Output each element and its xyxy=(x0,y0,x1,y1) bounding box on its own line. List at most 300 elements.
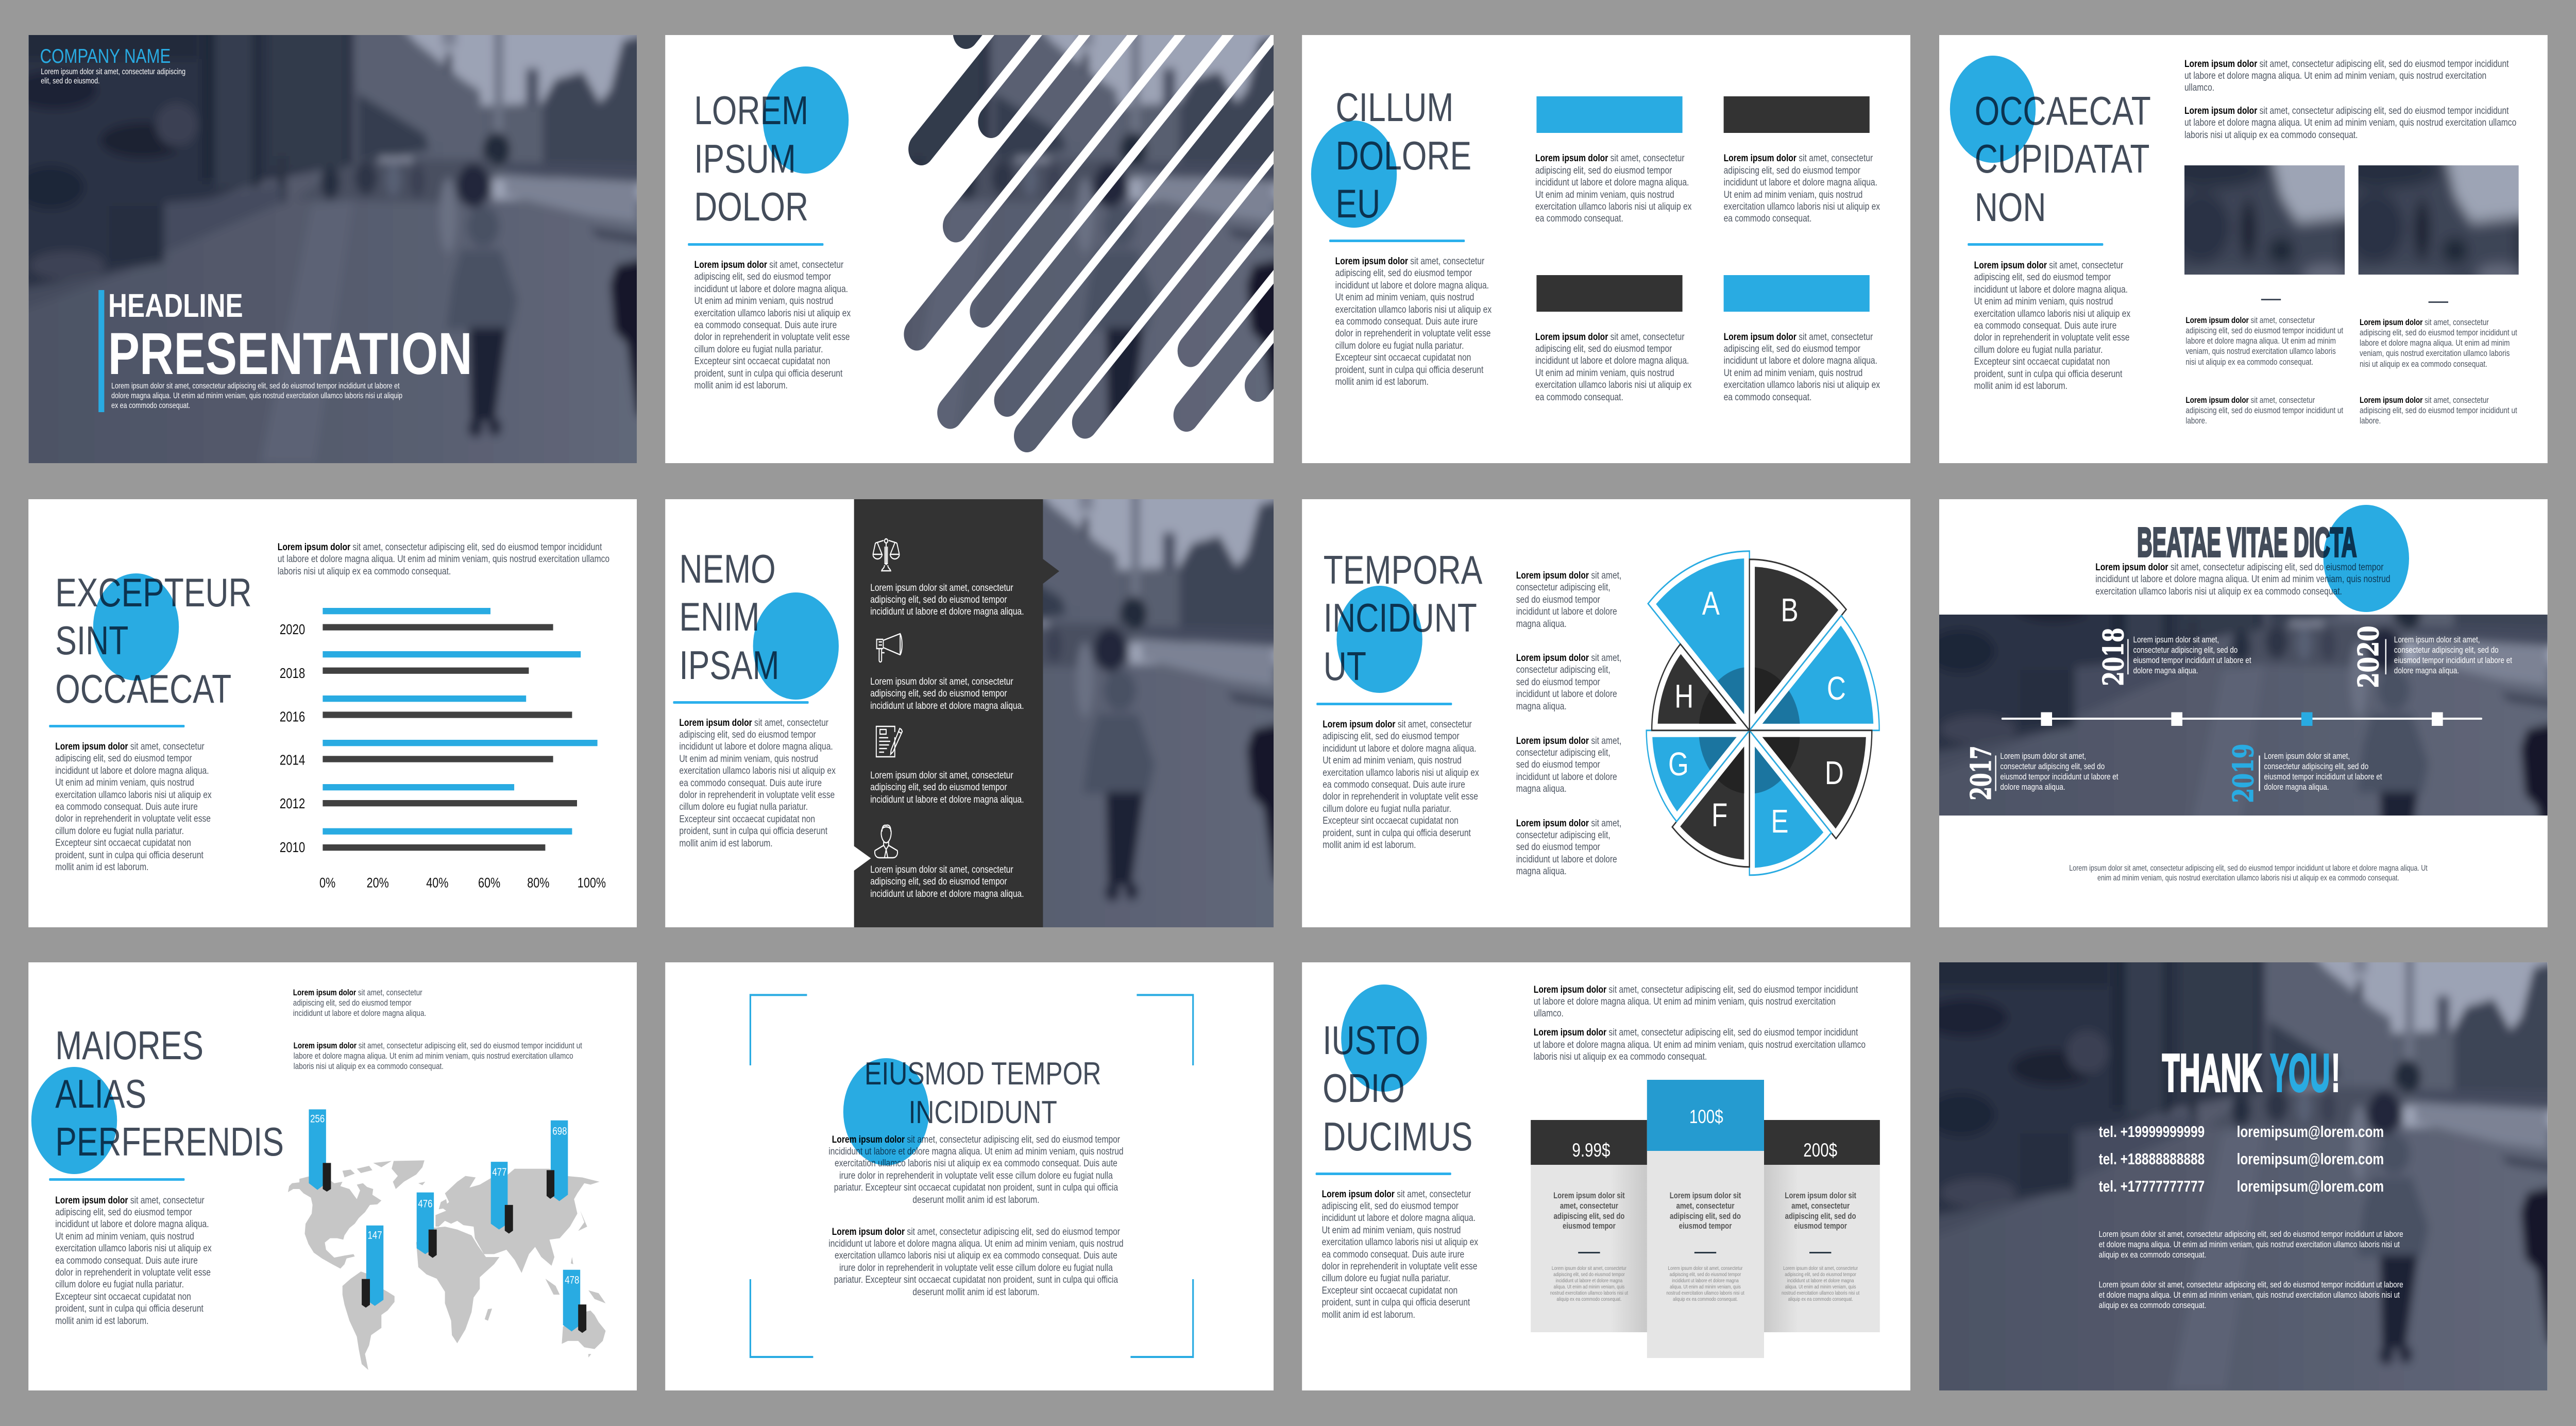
top paragraph two: laboris nisi ut aliquip ex ea commodo consequat. xyxy=(2184,129,2358,141)
heading: OCCAECAT xyxy=(55,666,231,711)
dash two xyxy=(1694,1252,1716,1253)
body text: incididunt ut labore et dolore magna aliqua. xyxy=(1322,1212,1476,1224)
body text: Ut enim ad minim veniam, quis nostrud xyxy=(679,753,818,765)
heading: SINT xyxy=(55,618,128,663)
body text: exercitation ullamco laboris nisi ut aliquip ex xyxy=(1323,767,1479,778)
wedge C xyxy=(1750,616,1906,811)
blue circle xyxy=(1950,56,2036,163)
bar chart: 40% xyxy=(426,875,448,890)
timeline xyxy=(1939,615,2548,816)
blue circle xyxy=(1311,121,1397,228)
icon text three: adipiscing elit, sed do eiusmod tempor xyxy=(870,782,1007,793)
blue circle xyxy=(753,592,839,700)
panel: nemo enim ipsam with icon list and photo xyxy=(665,499,1274,927)
heading xyxy=(1336,84,1471,226)
wedge G xyxy=(1625,666,1750,821)
panel: eiusmod tempor incididunt centred text xyxy=(665,962,1274,1390)
wheel text four xyxy=(1516,817,1621,878)
text top left: adipiscing elit, sed do eiusmod tempor xyxy=(1535,165,1672,176)
body text: adipiscing elit, sed do eiusmod tempor xyxy=(1323,731,1460,742)
top paragraph two: labore et dolore magna aliqua. Ut enim ad minim veniam, quis nostrud exercitation ullamco xyxy=(294,1051,573,1061)
body text: mollit anim id est laborum. xyxy=(694,380,788,391)
body text: proident, sunt in culpa qui officia deserunt xyxy=(1974,368,2122,380)
heading: IPSAM xyxy=(679,642,779,688)
heading: EXCEPTEUR xyxy=(55,570,252,615)
heading xyxy=(1324,546,1482,690)
milestone text 2018: dolore magna aliqua. xyxy=(2133,666,2198,675)
top paragraph: Lorem ipsum dolor sit amet, consectetur adipiscing elit, sed do eiusmod tempor incididunt xyxy=(278,541,602,553)
pin 476: 476 xyxy=(418,1198,432,1210)
top paragraph one: Lorem ipsum dolor sit amet, consectetur adipiscing elit, sed do eiusmod tempor incididunt xyxy=(1534,984,1858,995)
closing paragraph one xyxy=(2099,1229,2403,1261)
paragraph two: irure dolor in reprehenderit in voluptate velit esse cillum dolore eu fugiat nulla xyxy=(839,1262,1113,1274)
text top right: incididunt ut labore et dolore magna aliqua. xyxy=(1724,177,1877,188)
text bottom right: adipiscing elit, sed do eiusmod tempor xyxy=(1724,343,1860,354)
wedge letters: B xyxy=(1781,591,1799,629)
pin 698: 698 xyxy=(552,1125,567,1137)
plan title three: Lorem ipsum dolor sit xyxy=(1785,1191,1856,1200)
wheel text two: consectetur adipiscing elit, xyxy=(1516,664,1611,675)
body text: Excepteur sint occaecat cupidatat non xyxy=(1322,1285,1458,1296)
heading: LOREM xyxy=(694,88,808,133)
body text: Ut enim ad minim veniam, quis nostrud xyxy=(55,777,194,788)
body text: exercitation ullamco laboris nisi ut aliquip ex xyxy=(55,1243,212,1254)
note left: labore. xyxy=(2185,416,2207,426)
icon: person xyxy=(874,823,900,859)
plan text one: adipiscing elit, sed do eiusmod tempor xyxy=(1553,1272,1625,1278)
top paragraph one: ut labore et dolore magna aliqua. Ut enim ad minim veniam, quis nostrud exercitation xyxy=(1534,996,1836,1007)
heading xyxy=(679,545,779,689)
bar chart: 100% xyxy=(578,875,605,890)
diagonal photo stripes xyxy=(904,35,1274,452)
bar chart: 2018 xyxy=(280,665,305,681)
body text: Lorem ipsum dolor sit amet, consectetur xyxy=(679,717,828,728)
company tagline xyxy=(41,67,185,86)
text bottom right xyxy=(1724,331,1880,403)
dark block bottom left xyxy=(1536,275,1683,311)
top paragraph two: Lorem ipsum dolor sit amet, consectetur adipiscing elit, sed do eiusmod tempor incididunt xyxy=(1534,1027,1858,1038)
heading: NON xyxy=(1975,184,2046,230)
pin 147 xyxy=(362,1226,383,1308)
paragraph two: Lorem ipsum dolor sit amet, consectetur adipiscing elit, sed do eiusmod tempor xyxy=(832,1226,1120,1237)
plan text two: aliquip ex ea commodo consequat. xyxy=(1673,1297,1738,1302)
email addresses: loremipsum@lorem.com xyxy=(2237,1178,2384,1195)
icon text one: incididunt ut labore et dolore magna aliqua. xyxy=(870,606,1024,617)
body text: exercitation ullamco laboris nisi ut aliquip ex xyxy=(1322,1236,1478,1248)
body text: ea commodo consequat. Duis aute irure xyxy=(1335,316,1478,327)
body text: adipiscing elit, sed do eiusmod tempor xyxy=(679,729,816,740)
milestone text 2020: eiusmod tempor incididunt ut labore et xyxy=(2394,655,2512,665)
body text: Ut enim ad minim veniam, quis nostrud xyxy=(1323,755,1462,766)
wheel text one xyxy=(1516,570,1621,630)
text top left: Ut enim ad minim veniam, quis nostrud xyxy=(1535,189,1674,200)
body text: proident, sunt in culpa qui officia deserunt xyxy=(1335,364,1483,376)
closing text: Lorem ipsum dolor sit amet, consectetur adipiscing elit, sed do eiusmod tempor incididunt ut labore et dolore magna aliqua. Ut xyxy=(2069,864,2428,873)
body text: ea commodo consequat. Duis aute irure xyxy=(679,777,822,789)
text bottom right: Lorem ipsum dolor sit amet, consectetur xyxy=(1724,331,1873,342)
paragraph two: exercitation ullamco laboris nisi ut aliquip ex ea commodo consequat. Duis aute xyxy=(835,1250,1117,1261)
milestone text 2017: Lorem ipsum dolor sit amet, xyxy=(2000,751,2086,760)
phone numbers: tel. +18888888888 xyxy=(2099,1150,2205,1168)
text top right: ea commodo consequat. xyxy=(1724,213,1811,224)
paragraph one: pariatur. Excepteur sint occaecat cupidatat non proident, sunt in culpa qui officia xyxy=(834,1182,1118,1193)
milestone text 2020: consectetur adipiscing elit, sed do xyxy=(2394,645,2499,654)
dash three xyxy=(1809,1252,1831,1253)
body text: exercitation ullamco laboris nisi ut aliquip ex xyxy=(55,789,212,801)
plan text one: nostrud exercitation ullamco laboris nisi ut xyxy=(1550,1291,1628,1296)
text top left: incididunt ut labore et dolore magna aliqua. xyxy=(1535,177,1689,188)
body text: adipiscing elit, sed do eiusmod tempor xyxy=(55,753,192,764)
blue circle xyxy=(1336,585,1422,692)
pin 477: 477 xyxy=(492,1166,506,1178)
body text: adipiscing elit, sed do eiusmod tempor xyxy=(694,271,831,282)
top paragraph two: laboris nisi ut aliquip ex ea commodo consequat. xyxy=(1534,1051,1707,1062)
pin 477 xyxy=(491,1162,513,1233)
wedge D xyxy=(1750,730,1872,838)
email addresses xyxy=(2237,1118,2384,1201)
blue block bottom right xyxy=(1724,275,1870,311)
heading xyxy=(55,569,252,713)
plan text two: incididunt ut labore et dolore magna xyxy=(1672,1278,1739,1284)
body text xyxy=(694,259,851,391)
icon text four: Lorem ipsum dolor sit amet, consectetur xyxy=(870,864,1013,875)
note right: adipiscing elit, sed do eiusmod tempor incididunt ut xyxy=(2360,405,2517,415)
top paragraph two xyxy=(2184,105,2516,141)
body text: Lorem ipsum dolor sit amet, consectetur xyxy=(1974,260,2123,271)
icon text four xyxy=(870,864,1024,900)
body text: Excepteur sint occaecat cupidatat non xyxy=(694,355,830,367)
body text: Ut enim ad minim veniam, quis nostrud xyxy=(694,295,833,307)
milestone text 2019: Lorem ipsum dolor sit amet, xyxy=(2264,751,2350,760)
note left xyxy=(2185,395,2343,427)
plan title three xyxy=(1763,1191,1878,1232)
wedge letters xyxy=(1668,584,1846,840)
body text: ea commodo consequat. Duis aute irure xyxy=(55,1255,198,1266)
note right: labore. xyxy=(2360,416,2381,426)
timeline: 2019 xyxy=(2227,744,2260,803)
photo right xyxy=(1043,499,1274,927)
closing paragraph two: Lorem ipsum dolor sit amet, consectetur adipiscing elit, sed do eiusmod tempor incididunt ut labore xyxy=(2099,1280,2403,1289)
body text: Lorem ipsum dolor sit amet, consectetur xyxy=(694,259,843,270)
body text: adipiscing elit, sed do eiusmod tempor xyxy=(1335,267,1472,279)
paragraph one xyxy=(770,1133,1182,1206)
dash left xyxy=(2261,299,2281,300)
note right xyxy=(2360,395,2517,427)
company tagline: elit, sed do eiusmod. xyxy=(41,77,100,86)
text top left: Lorem ipsum dolor sit amet, consectetur xyxy=(1535,152,1685,164)
body text: Ut enim ad minim veniam, quis nostrud xyxy=(1322,1225,1461,1236)
photo left xyxy=(2184,165,2345,275)
heading xyxy=(55,1022,284,1166)
intro paragraph: exercitation ullamco laboris nisi ut aliquip ex ea commodo consequat. xyxy=(2095,586,2342,597)
wheel text one: consectetur adipiscing elit, xyxy=(1516,582,1611,593)
wheel text one: incididunt ut labore et dolore xyxy=(1516,606,1617,617)
bar chart: 80% xyxy=(527,875,549,890)
paragraph two xyxy=(770,1226,1182,1298)
plan text two: aliqua. Ut enim ad minim veniam, quis xyxy=(1670,1284,1741,1290)
text bottom left: ea commodo consequat. xyxy=(1535,392,1623,403)
heading: IPSUM xyxy=(694,136,796,181)
body text: incididunt ut labore et dolore magna aliqua. xyxy=(1974,284,2128,295)
body text: ea commodo consequat. Duis aute irure xyxy=(55,801,198,812)
heading: ODIO xyxy=(1323,1065,1405,1111)
top paragraph two: laboris nisi ut aliquip ex ea commodo consequat. xyxy=(294,1061,444,1071)
text bottom right: incididunt ut labore et dolore magna aliqua. xyxy=(1724,355,1877,366)
body text: cillum dolore eu fugiat nulla pariatur. xyxy=(694,344,823,355)
heading: ALIAS xyxy=(55,1071,146,1116)
caption right: nisi ut aliquip ex ea commodo consequat. xyxy=(2360,359,2487,369)
plan text three: Lorem ipsum dolor sit amet, consectetur xyxy=(1783,1266,1858,1271)
wheel text three: consectetur adipiscing elit, xyxy=(1516,747,1611,758)
heading xyxy=(694,88,808,229)
plan title two: eiusmod tempor xyxy=(1679,1221,1732,1231)
icon text one: adipiscing elit, sed do eiusmod tempor xyxy=(870,594,1007,605)
blue circle xyxy=(2324,505,2409,612)
body text: incididunt ut labore et dolore magna aliqua. xyxy=(1335,280,1489,291)
intro paragraph: Lorem ipsum dolor sit amet, consectetur adipiscing elit, sed do eiusmod tempor xyxy=(2095,562,2383,573)
body text: ea commodo consequat. Duis aute irure xyxy=(1323,779,1465,790)
body text: mollit anim id est laborum. xyxy=(679,838,773,849)
blue block top left xyxy=(1536,96,1683,133)
closing paragraph one: aliquip ex ea commodo consequat. xyxy=(2099,1250,2206,1260)
plan text three: adipiscing elit, sed do eiusmod tempor xyxy=(1785,1272,1856,1278)
body text: exercitation ullamco laboris nisi ut aliquip ex xyxy=(679,765,836,776)
wheel text three xyxy=(1516,735,1621,795)
icon text three: Lorem ipsum dolor sit amet, consectetur xyxy=(870,770,1013,781)
body text: proident, sunt in culpa qui officia deserunt xyxy=(1323,827,1471,839)
heading: EU xyxy=(1336,181,1380,226)
body text: dolor in reprehenderit in voluptate velit esse xyxy=(1322,1261,1477,1272)
heading: TEMPORA xyxy=(1324,547,1482,592)
text top left: ea commodo consequat. xyxy=(1535,213,1623,224)
icon text two: incididunt ut labore et dolore magna aliqua. xyxy=(870,700,1024,711)
panel: beatae vitae dicta timeline xyxy=(1939,499,2548,927)
top paragraph two: Lorem ipsum dolor sit amet, consectetur adipiscing elit, sed do eiusmod tempor incididunt ut xyxy=(294,1041,582,1050)
heading: PERFERENDIS xyxy=(55,1119,284,1164)
body text xyxy=(1335,256,1492,387)
body text: mollit anim id est laborum. xyxy=(1335,376,1429,387)
heading xyxy=(777,1055,1189,1132)
closing text: enim ad minim veniam, quis nostrud exercitation ullamco laboris nisi ut aliquip ex ea commodo consequat. xyxy=(2097,874,2399,882)
heading: DOLORE xyxy=(1336,133,1471,178)
body text: mollit anim id est laborum. xyxy=(1323,839,1416,851)
body text: Lorem ipsum dolor sit amet, consectetur xyxy=(1322,1188,1471,1199)
body text: Lorem ipsum dolor sit amet, consectetur xyxy=(1323,719,1472,730)
body text: Excepteur sint occaecat cupidatat non xyxy=(1335,352,1471,363)
plan text one: incididunt ut labore et dolore magna xyxy=(1556,1278,1622,1284)
top paragraph one xyxy=(1534,984,1858,1020)
pin 478: 478 xyxy=(565,1275,579,1286)
wedge A xyxy=(1648,514,1821,730)
body text: proident, sunt in culpa qui officia deserunt xyxy=(694,368,842,379)
wedge letters: F xyxy=(1711,796,1727,834)
note left: adipiscing elit, sed do eiusmod tempor incididunt ut xyxy=(2185,405,2343,415)
bar chart: 20% xyxy=(367,875,389,890)
body text: ea commodo consequat. Duis aute irure xyxy=(1974,320,2116,331)
price header three: 200$ xyxy=(1803,1140,1837,1161)
plan title three: amet, consectetur xyxy=(1791,1201,1850,1211)
timeline: 2017 xyxy=(1965,746,1998,801)
heading underline xyxy=(673,701,809,704)
closing paragraph one: et dolore magna aliqua. Ut enim ad minim veniam, quis nostrud exercitation ullamco laboris nisi ut xyxy=(2099,1240,2400,1249)
company name: COMPANY NAME xyxy=(40,45,171,67)
body text: Excepteur sint occaecat cupidatat non xyxy=(1323,815,1459,826)
text bottom right: ea commodo consequat. xyxy=(1724,392,1811,403)
paragraph two: incididunt ut labore et dolore magna aliqua. Ut enim ad minim veniam, quis nostrud xyxy=(828,1238,1124,1249)
note left: Lorem ipsum dolor sit amet, consectetur xyxy=(2185,395,2315,405)
body text: proident, sunt in culpa qui officia deserunt xyxy=(1322,1297,1470,1308)
body text: Lorem ipsum dolor sit amet, consectetur xyxy=(1335,256,1484,267)
body text: ea commodo consequat. Duis aute irure xyxy=(1322,1249,1464,1260)
wedge letters: H xyxy=(1674,677,1693,715)
plan title two: adipiscing elit, sed do xyxy=(1670,1212,1741,1221)
dark centre panel with arrows xyxy=(854,499,1060,927)
closing paragraph two: aliquip ex ea commodo consequat. xyxy=(2099,1300,2206,1310)
body text: incididunt ut labore et dolore magna aliqua. xyxy=(1323,743,1477,754)
wheel text three: sed do eiusmod tempor xyxy=(1516,759,1600,770)
paragraph one: irure dolor in reprehenderit in voluptate velit esse cillum dolore eu fugiat nulla xyxy=(839,1170,1113,1181)
top paragraph one: Lorem ipsum dolor sit amet, consectetur xyxy=(293,988,422,997)
dash one xyxy=(1578,1252,1600,1253)
heading: OCCAECAT xyxy=(1975,88,2151,133)
heading underline xyxy=(688,243,823,246)
text bottom left: Ut enim ad minim veniam, quis nostrud xyxy=(1535,367,1674,379)
milestone text 2019: eiusmod tempor incididunt ut labore et xyxy=(2264,772,2382,781)
top paragraph: ut labore et dolore magna aliqua. Ut enim ad minim veniam, quis nostrud exercitation ullamco xyxy=(278,553,609,565)
body text: incididunt ut labore et dolore magna aliqua. xyxy=(55,1218,209,1230)
closing paragraph one: Lorem ipsum dolor sit amet, consectetur adipiscing elit, sed do eiusmod tempor incididunt ut labore xyxy=(2099,1229,2403,1239)
plan text one: aliquip ex ea commodo consequat. xyxy=(1556,1297,1621,1302)
wheel text three: magna aliqua. xyxy=(1516,783,1567,794)
body text: dolor in reprehenderit in voluptate velit esse xyxy=(679,789,835,801)
milestone text 2020 xyxy=(2394,635,2512,676)
wheel text three: Lorem ipsum dolor sit amet, xyxy=(1516,735,1621,746)
plan text two xyxy=(1647,1266,1764,1302)
plan text two: nostrud exercitation ullamco laboris nisi ut xyxy=(1666,1291,1744,1296)
pricing column one xyxy=(1531,1120,1648,1332)
text top right: Lorem ipsum dolor sit amet, consectetur xyxy=(1724,152,1873,164)
top paragraph one: ullamco. xyxy=(2184,82,2214,93)
wheel text one: Lorem ipsum dolor sit amet, xyxy=(1516,570,1621,581)
heading underline xyxy=(1968,243,2103,246)
bar chart: 2014 xyxy=(280,752,305,768)
pin 256: 256 xyxy=(310,1113,325,1125)
body text: exercitation ullamco laboris nisi ut aliquip ex xyxy=(694,308,851,319)
text bottom left xyxy=(1535,331,1692,403)
heading: UT xyxy=(1324,643,1366,689)
intro paragraph xyxy=(2095,562,2391,598)
wheel text two: sed do eiusmod tempor xyxy=(1516,676,1600,688)
body text xyxy=(679,717,836,850)
body text: proident, sunt in culpa qui officia deserunt xyxy=(679,825,827,837)
body text: proident, sunt in culpa qui officia deserunt xyxy=(55,1303,204,1314)
plan text one: Lorem ipsum dolor sit amet, consectetur xyxy=(1552,1266,1626,1271)
top paragraph two: Lorem ipsum dolor sit amet, consectetur adipiscing elit, sed do eiusmod tempor incididunt xyxy=(2184,105,2509,116)
milestone text 2018 xyxy=(2133,635,2251,676)
body text: mollit anim id est laborum. xyxy=(1322,1309,1415,1320)
body text: Excepteur sint occaecat cupidatat non xyxy=(55,837,191,848)
body text: dolor in reprehenderit in voluptate velit esse xyxy=(1335,328,1490,339)
bar chart: 0% xyxy=(319,875,335,890)
body text xyxy=(1323,719,1479,851)
heading xyxy=(1975,88,2151,230)
heading: DOLOR xyxy=(694,184,808,229)
milestone text 2020: dolore magna aliqua. xyxy=(2394,666,2459,675)
caption right: veniam, quis nostrud exercitation ullamco laboris xyxy=(2360,348,2510,358)
wheel text three: incididunt ut labore et dolore xyxy=(1516,771,1617,783)
top paragraph two xyxy=(294,1041,582,1072)
body text xyxy=(1322,1188,1478,1321)
wedge letters: A xyxy=(1702,584,1720,621)
caption right: adipiscing elit, sed do eiusmod tempor incididunt ut xyxy=(2360,328,2517,337)
icon: document and pen xyxy=(875,724,904,758)
price header two xyxy=(1647,1080,1764,1151)
plan title two xyxy=(1647,1191,1764,1232)
photo right xyxy=(2359,165,2519,275)
caption left: veniam, quis nostrud exercitation ullamco laboris xyxy=(2185,346,2336,356)
panel: cillum dolore eu four blocks xyxy=(1302,35,1910,463)
email addresses: loremipsum@lorem.com xyxy=(2237,1123,2384,1141)
panel: occaecat cupidatat non with two photos xyxy=(1939,35,2548,463)
intro text: Lorem ipsum dolor sit amet, consectetur adipiscing elit, sed do eiusmod tempor incididunt ut labore et xyxy=(111,382,400,391)
text bottom left: exercitation ullamco laboris nisi ut aliquip ex xyxy=(1535,379,1691,391)
body text: cillum dolore eu fugiat nulla pariatur. xyxy=(1322,1272,1450,1284)
plan text one: aliqua. Ut enim ad minim veniam, quis xyxy=(1554,1284,1624,1290)
pie wheel xyxy=(1638,543,1885,883)
body text: exercitation ullamco laboris nisi ut aliquip ex xyxy=(1974,308,2130,319)
wedge H xyxy=(1652,644,1750,730)
paragraph two: deserunt mollit anim id est laborum. xyxy=(912,1286,1040,1298)
intro text: ex ea commodo consequat. xyxy=(111,401,190,410)
body text: dolor in reprehenderit in voluptate velit esse xyxy=(1974,332,2129,343)
wheel text one: magna aliqua. xyxy=(1516,618,1567,630)
body text: cillum dolore eu fugiat nulla pariatur. xyxy=(1323,803,1451,814)
heading: CUPIDATAT xyxy=(1975,136,2150,181)
wheel text two: magna aliqua. xyxy=(1516,701,1567,712)
top paragraph one: adipiscing elit, sed do eiusmod tempor xyxy=(293,998,412,1008)
wheel text two: incididunt ut labore et dolore xyxy=(1516,688,1617,700)
bar chart: 2010 xyxy=(280,839,305,855)
pin 476 xyxy=(417,1193,437,1258)
top paragraph: laboris nisi ut aliquip ex ea commodo consequat. xyxy=(278,566,451,577)
body text: incididunt ut labore et dolore magna aliqua. xyxy=(55,765,209,776)
blue circle xyxy=(93,573,179,680)
heading: headline: HEADLINE xyxy=(108,287,243,324)
top paragraph two: ut labore et dolore magna aliqua. Ut enim ad minim veniam, quis nostrud exercitation ullamco xyxy=(1534,1039,1866,1050)
milestone text 2017: eiusmod tempor incididunt ut labore et xyxy=(2000,772,2119,781)
corner brackets xyxy=(748,991,1201,1362)
panel: excepteur sint occaecat bar chart xyxy=(28,499,637,927)
body text: proident, sunt in culpa qui officia deserunt xyxy=(55,850,204,861)
icon text one xyxy=(870,582,1024,618)
top paragraph xyxy=(278,541,609,578)
wedge letters: G xyxy=(1668,745,1689,782)
panel: title slide xyxy=(28,35,637,463)
caption right: Lorem ipsum dolor sit amet, consectetur xyxy=(2360,317,2489,327)
price header one xyxy=(1531,1120,1648,1165)
panel: lorem ipsum dolor with diagonal photo stripes xyxy=(665,35,1274,463)
bar chart: 60% xyxy=(478,875,500,890)
text top right xyxy=(1724,152,1880,224)
caption left xyxy=(2185,315,2343,367)
body text: mollit anim id est laborum. xyxy=(55,861,148,873)
body text: cillum dolore eu fugiat nulla pariatur. xyxy=(679,801,808,812)
pin 256 xyxy=(309,1109,331,1192)
body text: dolor in reprehenderit in voluptate velit esse xyxy=(694,331,850,343)
intro text xyxy=(111,382,402,410)
intro text: dolore magna aliqua. Ut enim ad minim veniam, quis nostrud exercitation ullamco laboris nisi ut aliquip xyxy=(111,392,402,400)
heading: presentation: PRESENTATION xyxy=(108,321,472,387)
